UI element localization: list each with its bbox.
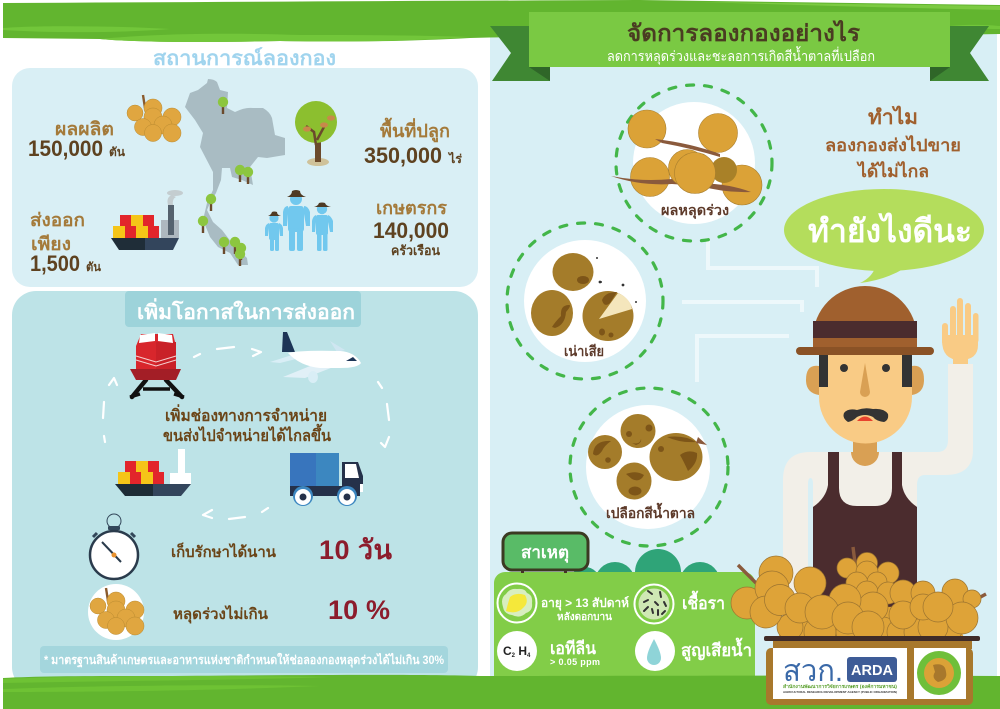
stat: production: ผลผลิต [55, 119, 114, 139]
logo: ARDA: สำนักงานพัฒนาการวิจัยการเกษตร (องค์การมหาชน) [783, 683, 898, 689]
face [819, 355, 912, 444]
icon: fruit bunch [127, 95, 181, 142]
top grass band [3, 0, 1000, 42]
heading: situation: สถานการณ์ลองกอง [153, 47, 336, 70]
icon: ethylene: 2 [512, 653, 516, 659]
stat: fruit drop [173, 595, 390, 625]
stat: fruit drop: หลุดร่วงไม่เกิน [173, 604, 269, 624]
stat: production: 150,000 [28, 136, 103, 161]
text: ethylene [550, 638, 600, 667]
footnote [40, 646, 448, 673]
icon: stopwatch [90, 514, 138, 579]
stat: farmers: 140,000 [373, 218, 449, 243]
stat: storage days: เก็บรักษาได้นาน [171, 542, 277, 561]
banner subtitle: ลดการหลุดร่วงและชะลอการเกิดสีน้ำตาลที่เปลือก [607, 46, 875, 65]
text: why [825, 105, 961, 181]
text: ethylene: > 0.05 ppm [550, 657, 600, 667]
text: ethylene: เอทีลีน [550, 638, 596, 658]
problem circle: brown skin [570, 388, 728, 546]
logo: ARDA: สวก. [783, 655, 843, 688]
stat: export: ส่งออก [30, 210, 85, 230]
stat: export: 1,500 [30, 251, 80, 276]
text: water loss: สูญเสียน้ำ [681, 637, 752, 662]
icon: ethylene: 4 [527, 653, 531, 659]
stat: farmers: เกษตรกร [376, 198, 447, 218]
text: fungus: เชื้อรา [682, 590, 725, 613]
text: distribution channels [163, 404, 331, 445]
icon: ethylene: H [515, 644, 527, 658]
stat: production: ตัน [109, 145, 126, 159]
mouth [857, 416, 873, 421]
ears [806, 366, 924, 395]
text: distribution channels: ขนส่งไปจำหน่ายได้ไกลขึ้น [163, 423, 331, 445]
sign: cause [503, 533, 588, 573]
shirt [783, 364, 973, 620]
ribbon banner [490, 12, 989, 81]
banner title: จัดการลองกองอย่างไร [627, 19, 861, 46]
icon: tree [295, 101, 337, 166]
background: right panel [490, 30, 997, 680]
neck [851, 440, 879, 466]
map of Thailand [185, 79, 285, 266]
icon: flower [498, 584, 536, 622]
stat: farmers [373, 198, 449, 258]
connector lines [682, 238, 817, 382]
stat: export: เพียง [31, 234, 71, 254]
problem circle: rotten fruit: เน่าเสีย [564, 343, 604, 359]
icon: ethylene [497, 631, 537, 671]
icon: ship [115, 449, 191, 496]
text: why: ทำไม [868, 105, 918, 129]
stat: planted area [364, 117, 463, 168]
apron [813, 452, 917, 640]
text: why: ได้ไม่ไกล [856, 161, 929, 181]
stat: storage days: 10 วัน [319, 535, 393, 565]
text: age [541, 596, 629, 623]
logo: university seal [914, 648, 966, 699]
arrow cycle [103, 347, 389, 519]
white right margin [997, 36, 1000, 676]
icon: water drop [635, 631, 675, 671]
stat: fruit drop: 10 % [328, 595, 390, 625]
footnote: * มาตรฐานสินค้าเกษตรและอาหารแห่งชาติกำหนดให้ช่อลองกองหลุดร่วงได้ไม่เกิน 30% [44, 652, 444, 668]
stat: export: ตัน [86, 260, 102, 274]
eyes [840, 364, 890, 372]
logo: ARDA [773, 648, 907, 699]
stat: planted area: 350,000 [364, 143, 442, 168]
causes hills [570, 549, 720, 602]
problem circle: fallen fruit: ผลหลุดร่วง [661, 202, 729, 219]
logo: ARDA: AGRICULTURAL RESEARCH DEVELOPMENT AGENCY (PUBLIC ORGANIZATION) [783, 690, 897, 694]
icon: airplane [270, 332, 361, 383]
sign: cause: สาเหตุ [521, 543, 569, 563]
icon: fruit in white circle [88, 584, 144, 640]
problem circle: brown skin: เปลือกสีน้ำตาล [606, 502, 695, 521]
panel: causes [494, 533, 755, 687]
hair [819, 355, 912, 387]
text: distribution channels: เพิ่มช่องทางการจำหน่าย [165, 404, 327, 425]
heading tab [125, 291, 361, 327]
problem circle: fallen fruit [611, 85, 772, 241]
icon: farmer family [265, 190, 333, 251]
stat: export [30, 210, 102, 276]
icon: train [130, 333, 184, 397]
crate with logos [764, 636, 980, 705]
nose [860, 363, 870, 397]
panel: export opportunities [12, 291, 478, 691]
stat: production [28, 119, 126, 161]
hand [942, 298, 978, 364]
farmer [783, 286, 978, 640]
heading tab: เพิ่มโอกาสในการส่งออก [137, 297, 355, 324]
stat: storage days [171, 535, 393, 565]
text: age: อายุ > 13 สัปดาห์ [541, 596, 629, 611]
icon: truck [290, 453, 363, 506]
text: why: ลองกองส่งไปขาย [825, 135, 961, 155]
mustache [844, 408, 888, 422]
icon: ethylene: C [503, 644, 512, 658]
text: age: หลังดอกบาน [557, 611, 612, 623]
icon: fungus [634, 584, 674, 624]
logo: ARDA: ARDA [851, 662, 893, 679]
panel: longkong situation [12, 68, 478, 287]
speech bubble [784, 189, 984, 283]
icon: cargo ship [111, 190, 183, 250]
stat: planted area: พื้นที่ปลูก [380, 117, 450, 143]
fruit pile [730, 546, 987, 636]
hat [796, 286, 934, 355]
stat: farmers: ครัวเรือน [391, 243, 440, 258]
speech bubble: ทำยังไงดีนะ [808, 212, 972, 249]
problem circle: rotten fruit [507, 223, 663, 379]
bottom grass band [3, 675, 1000, 709]
stat: planted area: ไร่ [447, 151, 463, 166]
